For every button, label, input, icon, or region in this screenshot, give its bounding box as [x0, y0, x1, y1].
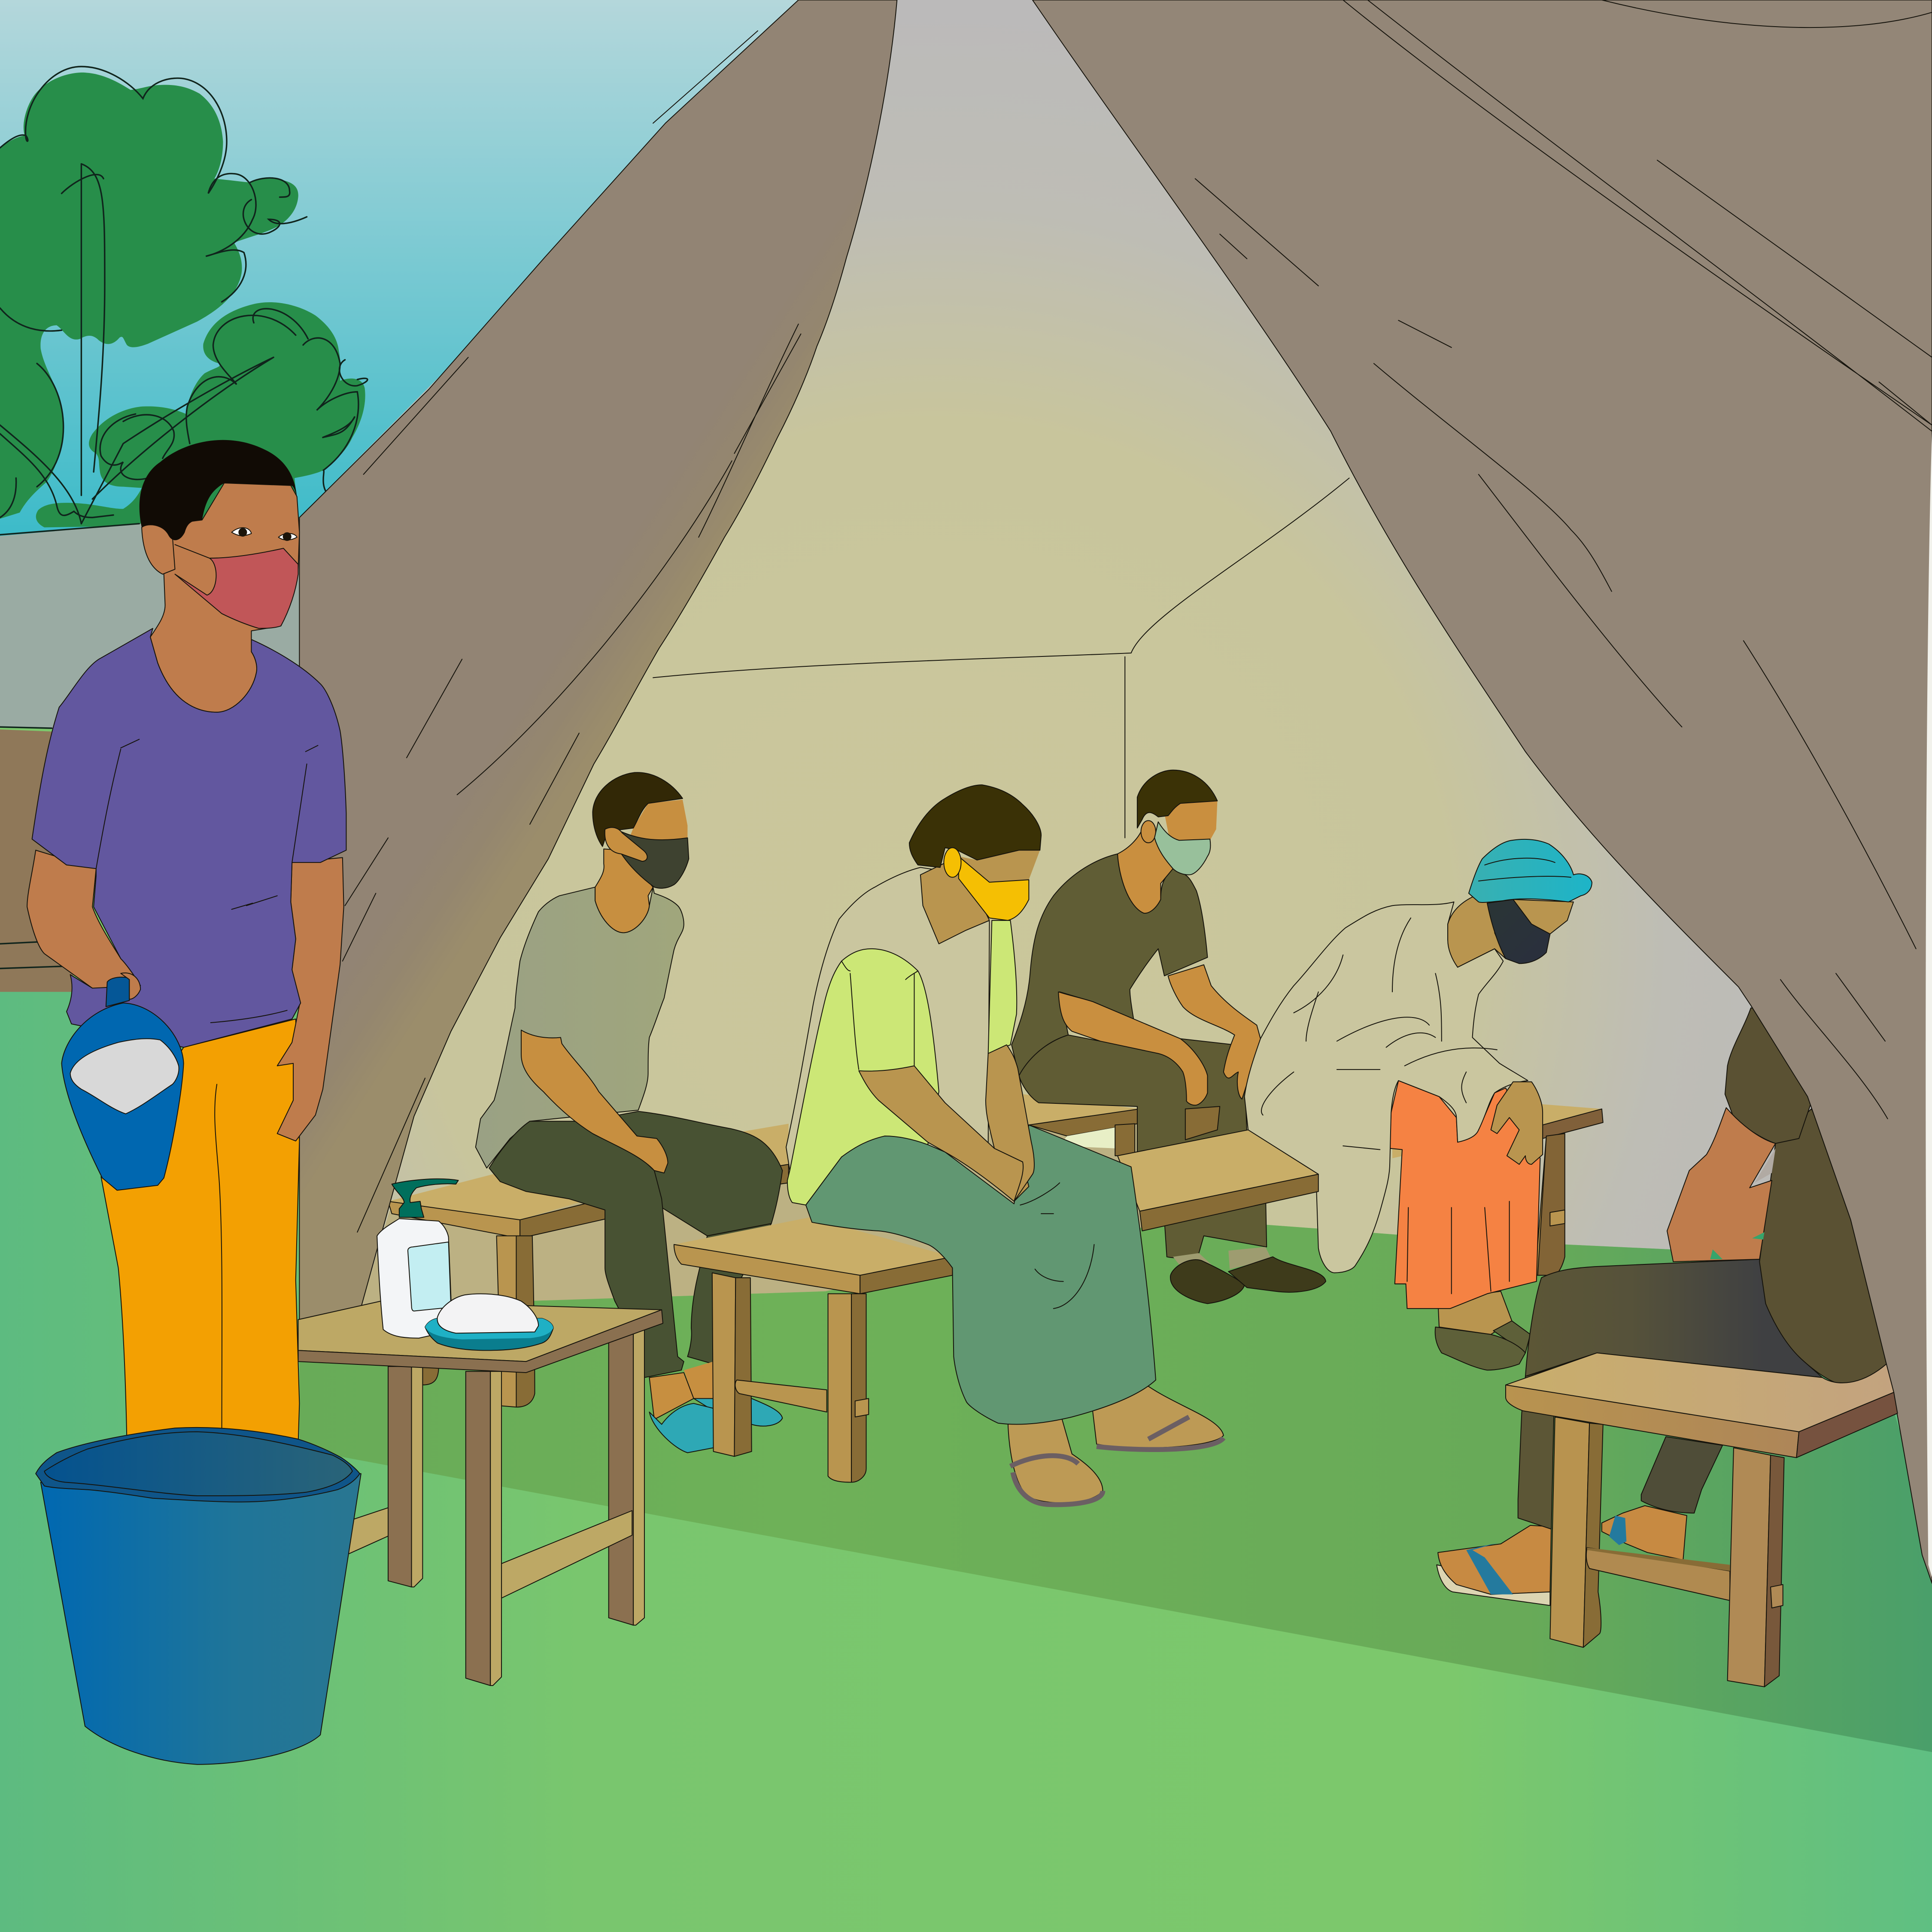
cloth wrap [1235, 902, 1528, 1273]
rear stretcher [346, 1501, 409, 1555]
neck and head [595, 849, 653, 933]
thighs [1019, 1035, 1247, 1156]
pale gap under bench [659, 1173, 727, 1185]
shoes [1170, 1260, 1245, 1303]
table leg: front [466, 1371, 490, 1686]
tent back wall [299, 0, 1932, 1318]
table top edge [298, 1310, 663, 1373]
building wall [0, 520, 308, 739]
skirt [806, 1125, 1156, 1424]
dish [425, 1318, 553, 1350]
shirt sleeve [1725, 1008, 1817, 1143]
bucket rim [36, 1428, 360, 1502]
white edge at far right [1926, 431, 1932, 1577]
arm: near [859, 1066, 1029, 1201]
bottle body [377, 1218, 452, 1338]
legs [1438, 1291, 1512, 1334]
front foot [1438, 1525, 1551, 1595]
scoop handle [106, 977, 129, 1007]
front slipper [649, 1403, 714, 1453]
rear trouser leg [1641, 1437, 1722, 1513]
tent floor [299, 1220, 1932, 1752]
scoop body [61, 1003, 184, 1190]
peg [1771, 1585, 1783, 1608]
tree outlines [0, 67, 368, 524]
back thigh [619, 1112, 782, 1236]
soap on dish [425, 1294, 553, 1350]
skirt folds [1407, 1201, 1510, 1294]
person: man in purple shirt [27, 440, 346, 1444]
neck [1448, 897, 1513, 967]
bench side: dark left [860, 1257, 952, 1294]
rear foot [684, 1361, 739, 1411]
front lower leg [1518, 1368, 1555, 1529]
scarf [786, 867, 990, 1170]
neck and head skin [148, 483, 299, 712]
bench front [1506, 1385, 1799, 1458]
bench side: dark right [1140, 1174, 1318, 1231]
hand fingers over scoop [121, 973, 140, 999]
bench peg [1550, 1210, 1565, 1226]
bucket opening [44, 1432, 352, 1496]
lower legs [1162, 1183, 1267, 1258]
neck and head [1118, 829, 1173, 913]
orange skirt [1390, 1081, 1540, 1309]
bench leg [497, 1236, 516, 1407]
hair [592, 772, 683, 847]
gap between arms [1755, 1148, 1776, 1183]
peg [855, 1398, 869, 1417]
table top [298, 1301, 662, 1361]
rear foot [1602, 1506, 1687, 1560]
arm: far [986, 1045, 1034, 1201]
bench top [1506, 1353, 1894, 1432]
hair [909, 785, 1041, 867]
sandal [1010, 1456, 1103, 1505]
soap [437, 1294, 538, 1333]
front foot sole [1437, 1565, 1550, 1605]
stretcher [501, 1510, 632, 1598]
bucket body [41, 1473, 361, 1765]
pump [392, 1179, 459, 1217]
dish rim [425, 1318, 553, 1340]
arm: far [1168, 965, 1261, 1099]
bench leg: rear [712, 1273, 735, 1456]
tree: large [0, 73, 298, 519]
cloth folds [1261, 918, 1497, 1150]
left arm [27, 850, 141, 1014]
front leg [489, 1121, 684, 1378]
ear and strap [605, 827, 647, 861]
bench top left [674, 1217, 952, 1275]
shirt [476, 887, 684, 1168]
right arm [277, 857, 344, 1141]
bench edge [1796, 1392, 1898, 1458]
hair [1137, 770, 1217, 828]
bench side: light [674, 1245, 860, 1294]
person: woman seated with orange skirt and teal turban [1235, 839, 1603, 1370]
table leg: rear [388, 1367, 412, 1587]
shirt [1012, 854, 1207, 1075]
rear slipper [694, 1398, 782, 1426]
bench legs [1550, 1417, 1589, 1647]
shirt body [1759, 1109, 1898, 1386]
rear bench leg stub [422, 1367, 439, 1385]
hair [140, 440, 297, 540]
ear [944, 848, 961, 877]
fold lines [343, 31, 801, 1232]
face mask [175, 544, 298, 629]
scarf and shirt lines [841, 961, 918, 1069]
bench: foreground right [1506, 1353, 1898, 1687]
arm [1667, 1108, 1776, 1262]
bottle label [408, 1242, 451, 1311]
stretcher [735, 1380, 827, 1412]
stretcher [1586, 1548, 1730, 1601]
bench leg shade [516, 1236, 535, 1407]
turban [1469, 839, 1592, 902]
bench piece behind legs [1185, 1106, 1220, 1140]
bench: rear centre [1023, 1094, 1140, 1156]
front foot [649, 1373, 694, 1419]
skirt folds [1020, 1183, 1094, 1309]
hand [1491, 1082, 1543, 1164]
face mask [959, 857, 1029, 920]
tree: small [36, 302, 365, 527]
ground [0, 986, 1932, 1932]
bench top right [1118, 1130, 1318, 1211]
person: seated man in foreground, partly hidden [1437, 1008, 1898, 1605]
face [959, 850, 1040, 882]
bench: woman's bench [674, 1130, 1318, 1482]
person: man in dark olive shirt [1012, 770, 1326, 1303]
water in scoop [70, 1039, 179, 1114]
feet [1008, 1411, 1103, 1503]
face mask [1154, 822, 1210, 875]
tent interior [299, 0, 1932, 1752]
socks [1173, 1247, 1272, 1269]
hand sanitizer bottle [377, 1179, 459, 1338]
ear [1141, 820, 1156, 843]
face mask [1487, 899, 1550, 963]
water bucket [36, 1428, 361, 1765]
green gaps between fingers [1710, 1232, 1765, 1259]
rear sandal strap [1609, 1516, 1626, 1545]
lime shirt body [787, 949, 939, 1205]
trousers [1525, 1259, 1823, 1378]
tent flap: left [299, 0, 897, 1321]
arm: near [1058, 992, 1207, 1105]
bench: back left [388, 1124, 789, 1407]
table [298, 1301, 663, 1686]
person: man in grey shirt [476, 772, 782, 1453]
bench leg: front [828, 1294, 851, 1482]
scoop [61, 973, 184, 1190]
background building [0, 520, 308, 992]
bench: far right [1392, 1104, 1603, 1275]
fold lines [1195, 0, 1932, 1119]
trees [0, 67, 368, 527]
person: woman with yellow mask [786, 785, 1224, 1505]
ear [142, 525, 175, 574]
face mask [619, 830, 689, 888]
bench top [388, 1124, 789, 1220]
sky [0, 0, 936, 542]
neck [920, 857, 990, 944]
lime shirt strip [988, 920, 1017, 1054]
front sandal strap [1466, 1543, 1513, 1595]
face [1513, 899, 1574, 934]
tent flap: right [1033, 0, 1932, 1583]
rear leg [687, 1224, 772, 1364]
wooden fence [0, 729, 74, 992]
eyes [232, 528, 297, 541]
arm [521, 1030, 668, 1173]
shoes [1493, 1321, 1530, 1353]
bench side: dark [520, 1164, 789, 1238]
shaded wall under benches [361, 1045, 1232, 1307]
trousers [101, 1019, 299, 1444]
bench side: light [388, 1201, 520, 1238]
table leg: right [609, 1333, 633, 1625]
shirt [32, 629, 346, 1047]
